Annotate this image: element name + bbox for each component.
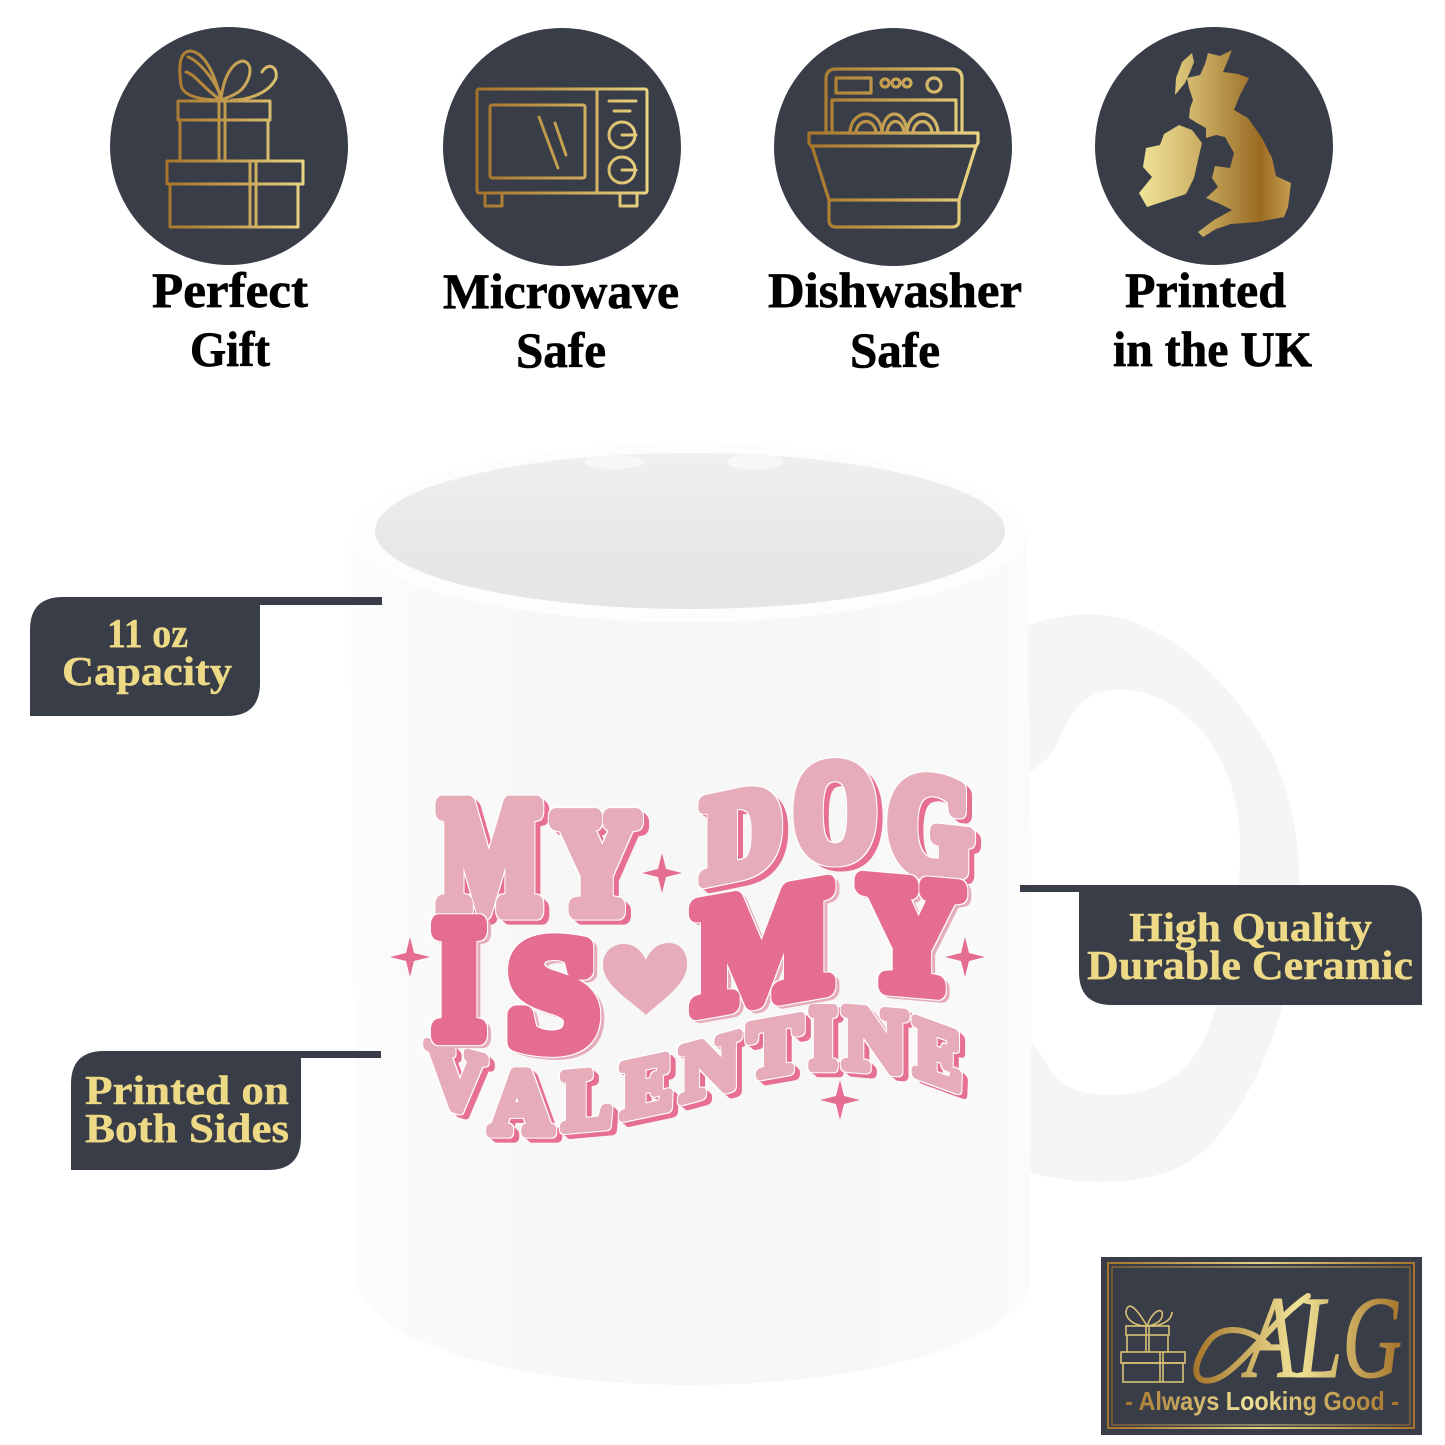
artwork line: IS MY: Y — [860, 844, 962, 1027]
mug body — [351, 443, 1032, 1385]
artwork line: VALENTINE: L — [563, 1051, 611, 1147]
artwork line: MY DOG: M — [440, 769, 540, 945]
artwork line: VALENTINE — [427, 988, 961, 1152]
label: perfect gift: Perfect — [152, 262, 308, 318]
heart — [603, 943, 687, 1015]
mug handle — [1020, 614, 1299, 1182]
callout: high quality durable ceramic: High Quality — [1129, 904, 1373, 950]
label: dishwasher safe — [768, 262, 1022, 378]
artwork line: VALENTINE: E — [622, 1037, 672, 1135]
label: perfect gift — [152, 262, 308, 377]
label: printed in the UK — [1113, 262, 1312, 377]
callout: 11 oz capacity: 11 oz — [107, 610, 188, 656]
label: microwave safe: Safe — [516, 322, 606, 378]
label: microwave safe — [443, 263, 679, 378]
artwork line: MY DOG: Y — [554, 784, 638, 943]
callout: 11 oz capacity — [30, 597, 382, 716]
artwork line: VALENTINE: E — [915, 1001, 961, 1109]
icon: perfect gift badge — [110, 27, 348, 265]
mug opening — [375, 453, 1005, 609]
artwork line: MY DOG: D — [703, 758, 781, 907]
icon: UK map badge — [1095, 27, 1333, 265]
callout: high quality durable ceramic — [1020, 885, 1422, 1005]
callout: printed on both sides — [71, 1051, 381, 1170]
mug rim band — [351, 443, 1026, 622]
artwork line: MY DOG: G — [888, 745, 972, 906]
rim highlights — [585, 454, 783, 470]
artwork line: IS MY: M — [695, 846, 831, 1045]
mug artwork: my dog is my valentine — [390, 736, 985, 1152]
label: printed in the UK: in the UK — [1113, 321, 1312, 377]
label: dishwasher safe: Dishwasher — [768, 262, 1022, 318]
artwork line: VALENTINE: T — [749, 999, 801, 1096]
logo gift icon — [1121, 1306, 1185, 1382]
logo: always looking good — [1101, 1257, 1422, 1435]
artwork line: IS MY: I — [434, 886, 484, 1072]
artwork line: VALENTINE: N — [844, 988, 906, 1091]
artwork line: MY DOG: O — [795, 736, 875, 887]
sparkle stars — [390, 853, 985, 1120]
artwork line: VALENTINE: I — [810, 988, 836, 1086]
mug illustration — [351, 443, 1299, 1385]
callout: printed on both sides: Printed on — [85, 1067, 289, 1113]
artwork line: MY DOG — [440, 736, 972, 945]
artwork line: VALENTINE: A — [490, 1052, 552, 1152]
map of the British Isles — [1139, 50, 1291, 237]
callout: high quality durable ceramic: Durable Ceramic — [1087, 942, 1413, 988]
label: dishwasher safe: Safe — [850, 322, 940, 378]
artwork line: IS MY — [434, 844, 962, 1081]
artwork line: IS MY: S — [509, 908, 597, 1081]
label: perfect gift: Gift — [190, 321, 270, 377]
artwork line: VALENTINE: V — [427, 1024, 485, 1134]
icon: microwave badge — [443, 28, 681, 266]
logo swash — [1196, 1296, 1308, 1381]
logo tagline: - Always Looking Good - — [1125, 1386, 1399, 1416]
label: microwave safe: Microwave — [443, 263, 679, 319]
label: printed in the UK: Printed — [1125, 262, 1286, 318]
callout: printed on both sides: Both Sides — [85, 1105, 289, 1151]
callout: 11 oz capacity: Capacity — [62, 648, 233, 694]
artwork line: VALENTINE: N — [681, 1015, 739, 1118]
icon: dishwasher badge — [774, 28, 1012, 266]
